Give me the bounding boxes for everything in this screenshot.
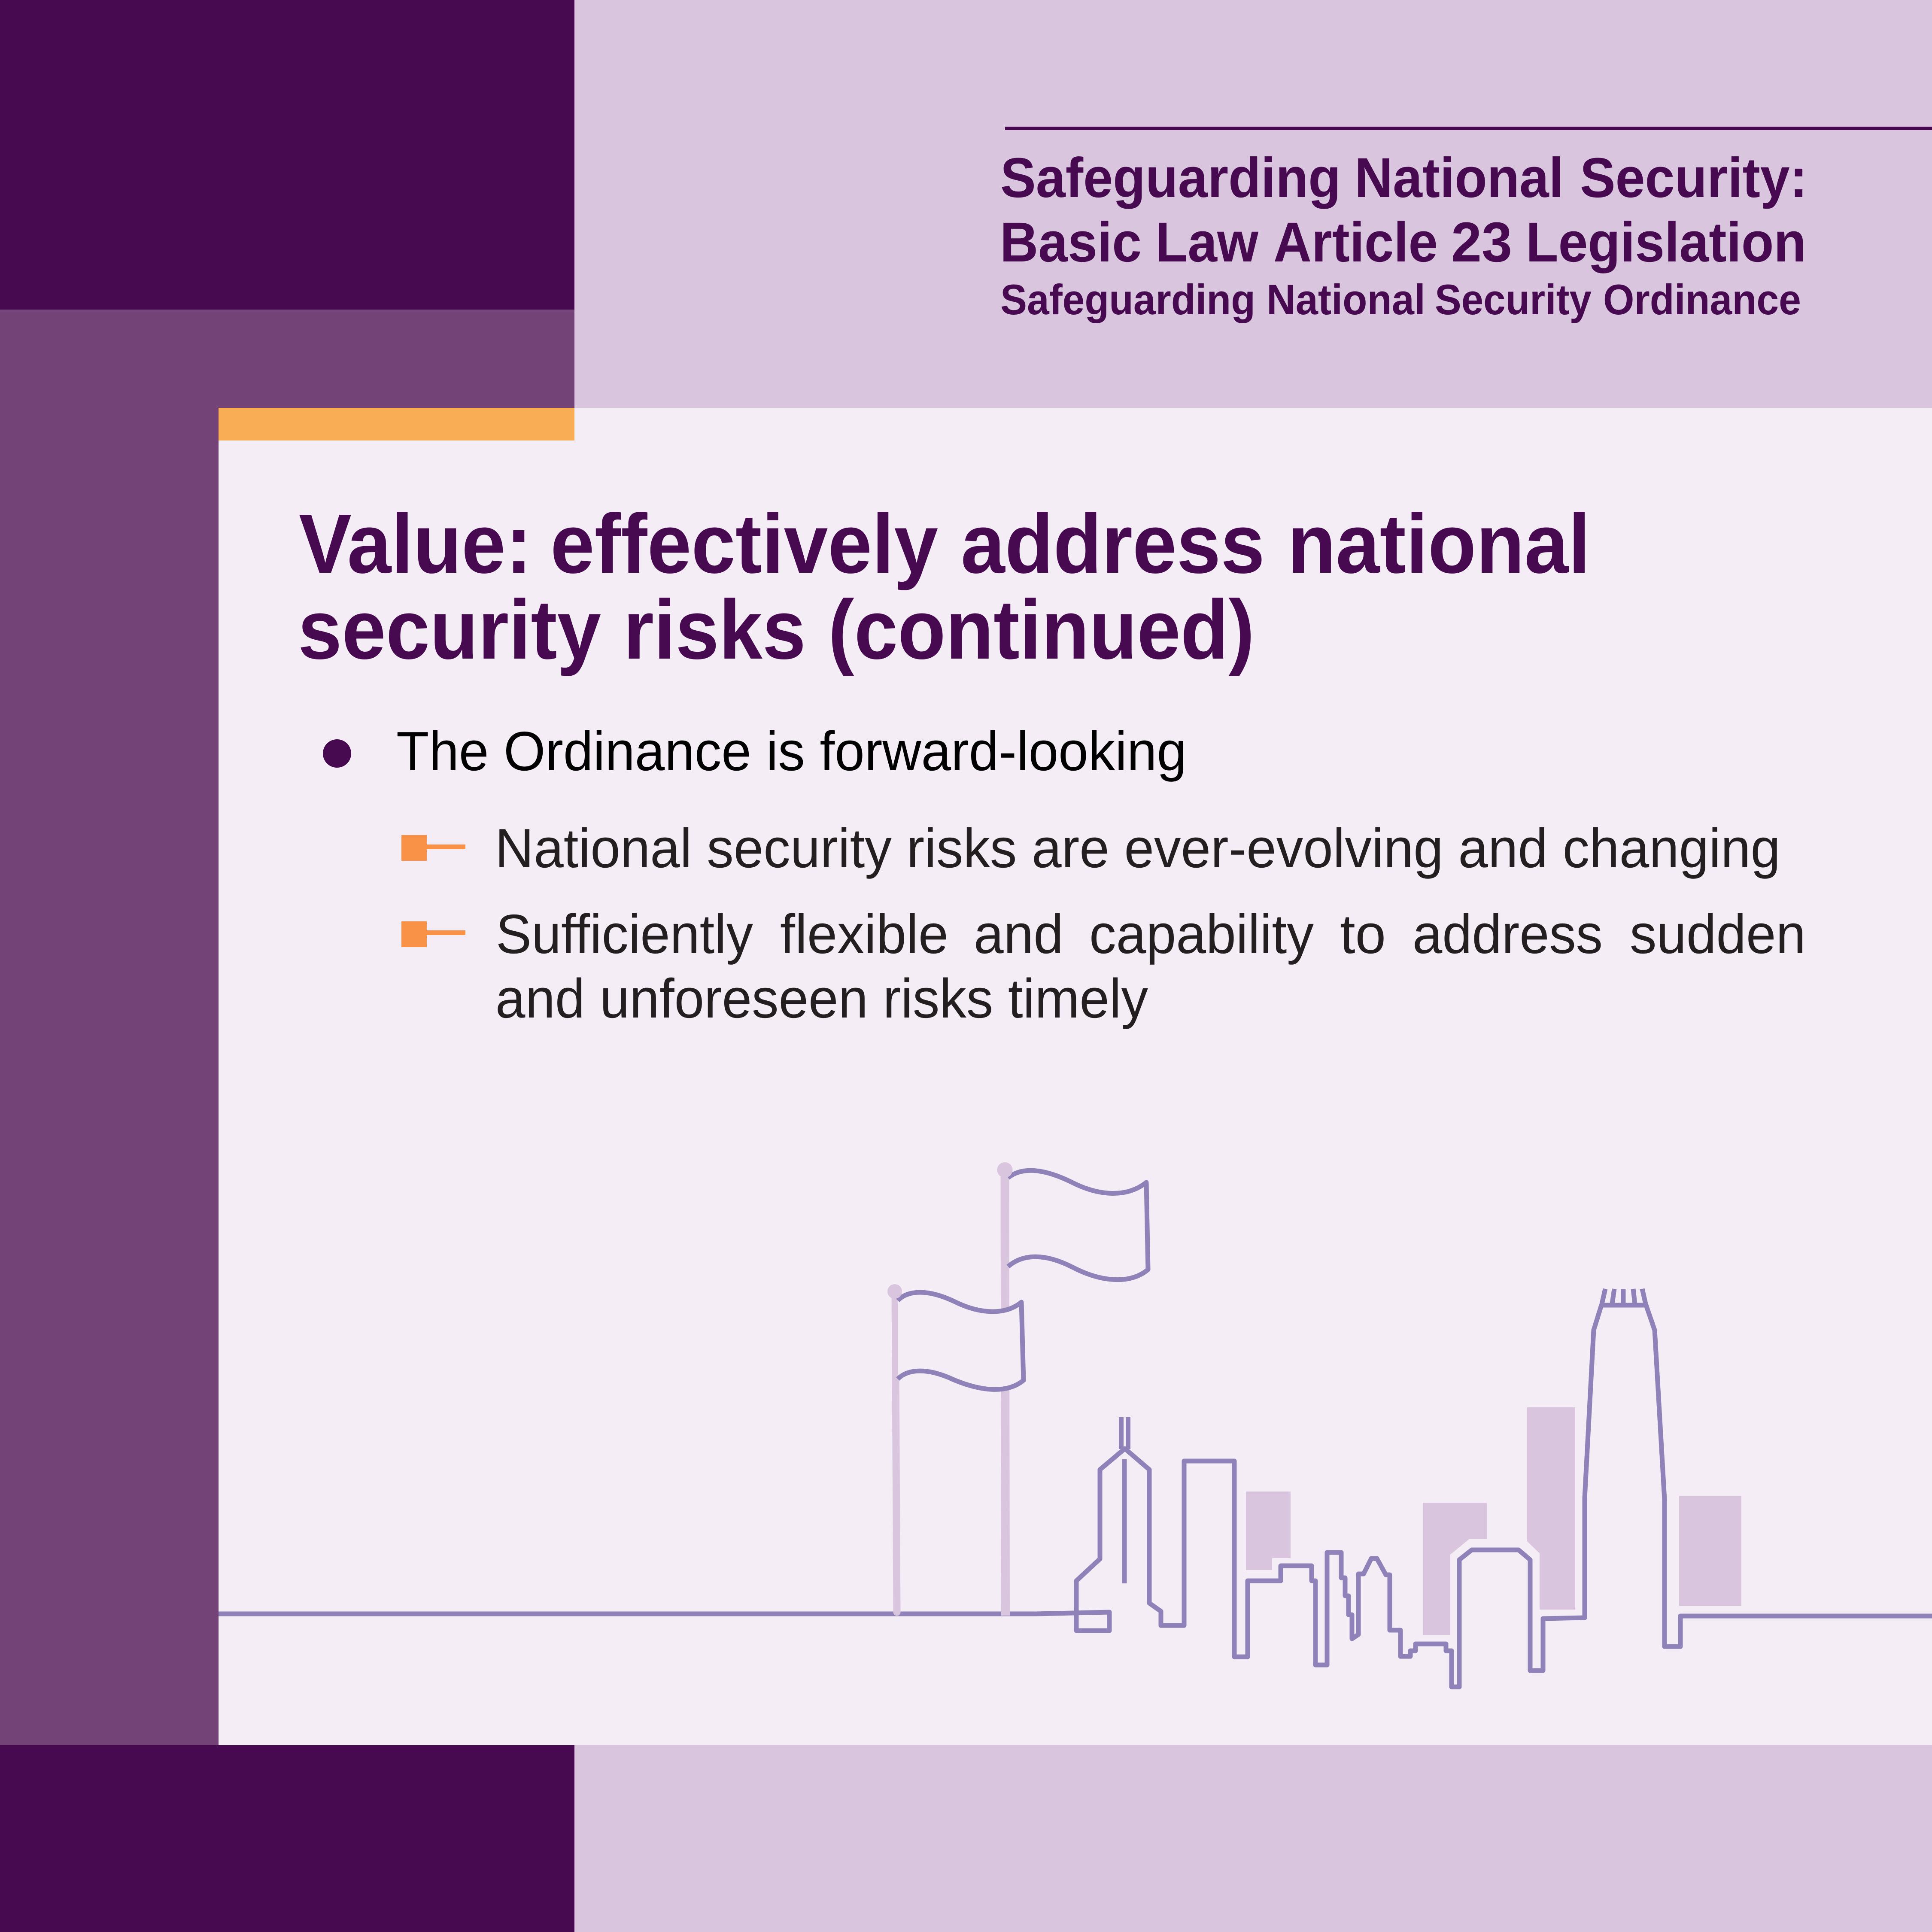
header title line 2: Basic (1000, 210, 1142, 273)
panel: main content (219, 408, 1932, 1745)
header title line 1: Security: (1580, 146, 1807, 209)
tower crown ticks (1602, 1289, 1646, 1304)
header title line 1 (1000, 146, 1807, 209)
justified line: and (974, 903, 1063, 965)
heading line 2 (298, 583, 1255, 677)
second line: and unforeseen risks timely (495, 968, 1148, 1030)
header title line 1: National (1355, 146, 1564, 209)
justified line: to (1340, 903, 1386, 965)
header title line 2: Article (1273, 210, 1438, 273)
main heading (298, 497, 1590, 677)
header subtitle: Ordinance (1603, 276, 1801, 323)
bullet text: forward-looking: The Ordinance is forward-looking (396, 720, 1187, 782)
header subtitle: Security (1435, 276, 1592, 323)
heading line 1: Value: (299, 497, 532, 591)
header title line 2: Law (1155, 210, 1259, 273)
heading line 1: effectively (550, 497, 938, 591)
tall flag (1008, 1170, 1148, 1280)
heading line 2: (continued) (828, 583, 1255, 677)
sub-bullet icon 2 (401, 921, 465, 947)
heading line 1: national (1288, 497, 1590, 591)
short pole knob (887, 1284, 902, 1299)
header title line 1: Safeguarding (1000, 146, 1341, 209)
twin antenna (1121, 1417, 1128, 1449)
panel: top-left dark block (0, 0, 574, 310)
sub-bullet icon 1 (401, 835, 465, 861)
skyline filled blocks (1246, 1407, 1741, 1635)
header title block (1000, 146, 1807, 323)
sub-bullet text 2 (495, 903, 1806, 1030)
short flag (898, 1292, 1024, 1389)
justified line: sudden (1630, 903, 1806, 965)
justified line: Sufficiently (496, 903, 753, 965)
tall pole knob (997, 1162, 1012, 1178)
justified line: address (1413, 903, 1603, 965)
heading line 1: address (961, 497, 1265, 591)
panel: mid purple band (0, 310, 574, 1745)
heading line 2: security (298, 583, 601, 677)
illustration: flags and skyline (219, 1162, 1932, 1687)
central tower line (1122, 1459, 1127, 1583)
heading line 1 (299, 497, 1590, 591)
bullet: circle (323, 739, 351, 768)
accent: orange bar (219, 408, 574, 440)
header subtitle: Safeguarding (1000, 276, 1255, 323)
justified line: capability (1089, 903, 1314, 965)
header subtitle (1000, 276, 1801, 323)
sub-bullet text 1: National security risks are ever-evolving and changing (495, 817, 1780, 879)
header subtitle: National (1267, 276, 1425, 323)
skyline outline (219, 1289, 1932, 1687)
header title line 2: Legislation (1526, 210, 1806, 273)
header title line 2: 23 (1451, 210, 1512, 273)
header rule (1005, 127, 1932, 130)
heading line 2: risks (623, 583, 806, 677)
header title line 2 (1000, 210, 1806, 273)
short flag pole (895, 1291, 897, 1612)
justified line (496, 903, 1806, 965)
panel: bottom-left dark block (0, 1745, 574, 1932)
justified line: flexible (780, 903, 948, 965)
